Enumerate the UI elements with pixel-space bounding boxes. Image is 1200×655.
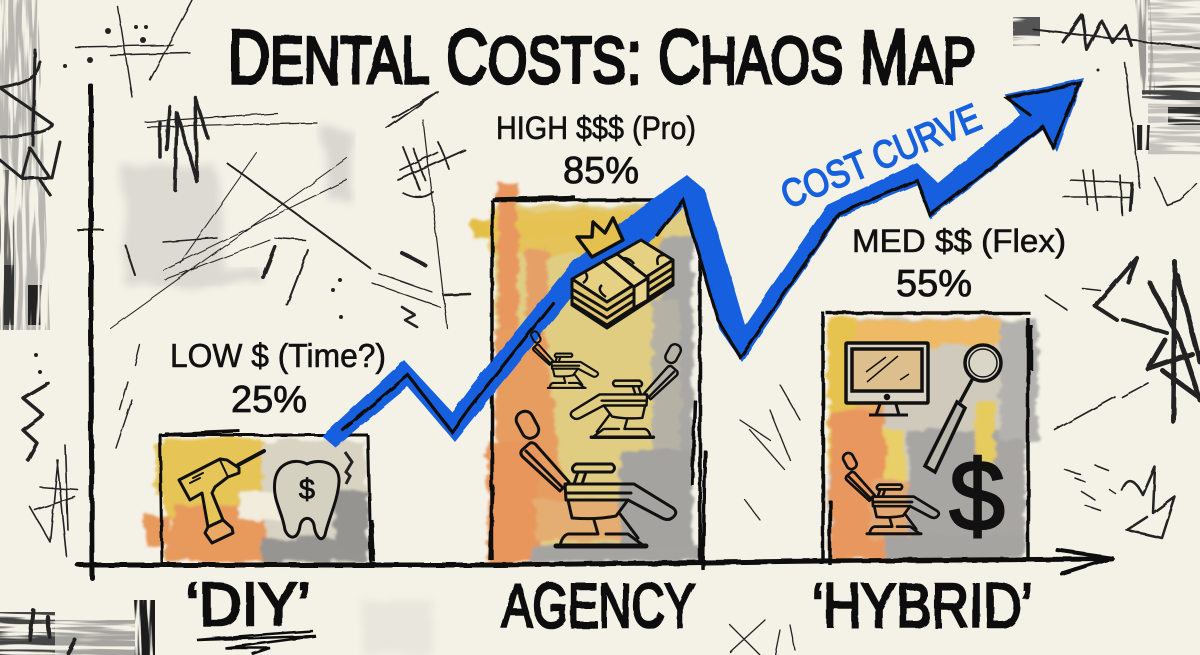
chart label: medium cost	[852, 223, 1066, 305]
icon: crown	[577, 218, 623, 257]
chart label: medium cost: 55%	[896, 263, 972, 305]
chart label: low cost	[170, 337, 386, 421]
icon: tooth with dollar	[274, 452, 352, 539]
chart label: low cost: 25%	[231, 379, 307, 421]
icon: computer monitor	[846, 343, 928, 415]
icon: large dental chair	[513, 408, 676, 546]
axes	[78, 86, 1113, 578]
Agency frame	[490, 197, 705, 570]
Hybrid frame	[823, 312, 1031, 565]
icon: hybrid dental chair	[841, 451, 939, 534]
icon: dental mirror	[925, 345, 1001, 472]
Hybrid paint swatches	[828, 316, 1038, 560]
category label: Agency: AGENCY	[502, 572, 695, 641]
DIY frame	[160, 431, 374, 565]
DIY paint swatches	[145, 438, 368, 565]
panel: Agency icons	[513, 218, 683, 546]
icon: small dental chair	[530, 330, 598, 388]
category label: DIY: ‘DIY’	[186, 571, 311, 638]
curve label: COST CURVE	[775, 96, 987, 217]
icon: dollar sign: $	[949, 440, 1005, 552]
chart label: high cost: HIGH $$$ (Pro)	[496, 110, 696, 146]
icon: drill	[179, 451, 264, 543]
Agency paint swatches	[472, 182, 700, 562]
panel: Hybrid bar	[823, 312, 1038, 565]
chart label: high cost: 85%	[563, 150, 639, 192]
icon: medium dental chair	[571, 342, 683, 437]
chart label: medium cost: MED $$ (Flex)	[852, 223, 1066, 259]
icon: tooth with dollar: $	[299, 474, 315, 506]
icon: stack of money	[572, 240, 673, 328]
category label: Hybrid: ‘HYBRID’	[812, 572, 1033, 641]
panel: Agency bar	[472, 182, 705, 570]
cost curve arrow	[322, 78, 1084, 447]
chart label: high cost	[496, 110, 696, 192]
chart label: low cost: LOW $ (Time?)	[170, 337, 386, 374]
title: DENTAL COSTS: CHAOS MAP	[228, 15, 976, 100]
panel: DIY bar	[145, 431, 374, 565]
